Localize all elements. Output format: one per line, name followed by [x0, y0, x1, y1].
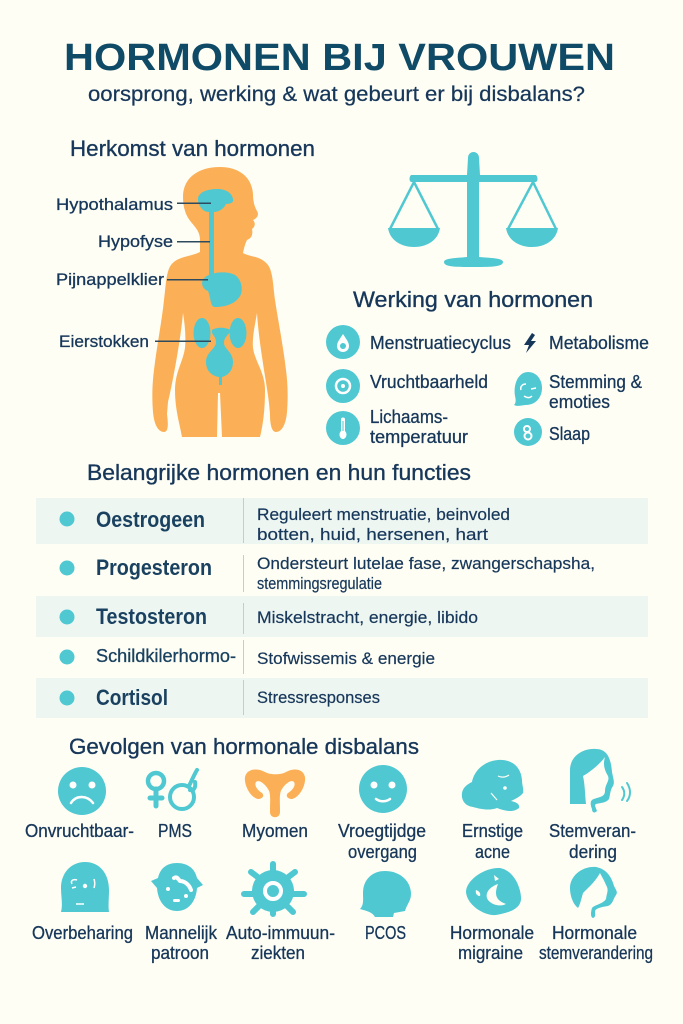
organ: liver shape	[202, 272, 242, 307]
item: Stemming en emoties: emoties	[549, 392, 610, 412]
heading: hormonen tabel: Belangrijke hormonen en hun functies	[87, 460, 471, 485]
row: Oestrogeen: Reguleert menstruatie, beinvoled	[257, 505, 510, 524]
item: Stemverandering	[549, 749, 636, 862]
row: Schildklierhormoon: Stofwissemis & energie	[257, 649, 435, 668]
row: Testosteron: Miskelstracht, energie, libido	[257, 608, 478, 627]
item: Hormonale migraine: Hormonale	[450, 923, 534, 943]
item: Slaap	[514, 418, 590, 446]
heading: werking: Werking van hormonen	[353, 287, 593, 312]
item: Lichaamstemperatuur: temperatuur	[370, 427, 468, 447]
item: Stemming en emoties: Stemming &	[549, 372, 642, 392]
item: Ernstige acne	[462, 760, 523, 862]
heading: gevolgen: Gevolgen van hormonale disbalans	[69, 734, 419, 759]
label: Hypofyse	[98, 232, 210, 251]
item: Metabolisme: Metabolisme	[549, 333, 649, 353]
icon: balance scale	[388, 152, 558, 267]
item: Vroegtijdige overgang: Vroegtijdge	[338, 821, 426, 841]
body silhouette	[152, 167, 288, 437]
row: Progesteron	[60, 554, 595, 593]
item: Ernstige acne: Ernstige	[462, 821, 523, 841]
item: PCOS	[360, 871, 411, 943]
item: Ernstige acne: acne	[475, 842, 510, 862]
item: Onvruchtbaarheid: Onvruchtbaar-	[25, 821, 134, 841]
row: Oestrogeen	[36, 498, 648, 544]
panel: herkomst van hormonen	[56, 136, 315, 437]
row: Progesteron: Progesteron	[96, 555, 212, 580]
item: Lichaamstemperatuur	[326, 407, 468, 447]
panel: werking van hormonen	[326, 287, 649, 447]
item: Slaap: Slaap	[549, 424, 590, 444]
organ: ovaries and uterus	[194, 318, 246, 385]
label: Hypofyse: Hypofyse	[98, 232, 173, 251]
title: HORMONEN BIJ VROUWEN	[64, 37, 615, 79]
item: Menstruatiecyclus: Menstruatiecyclus	[370, 333, 511, 353]
item: Myomen: Myomen	[242, 821, 308, 841]
row: Progesteron: Ondersteurt lutelae fase, zwangerschapsha,	[257, 554, 595, 573]
item: PMS	[148, 770, 197, 841]
row: Schildklierhormoon	[60, 640, 435, 674]
item: Hormonale migraine	[450, 868, 534, 963]
heading: herkomst: Herkomst van hormonen	[70, 136, 315, 161]
item: Hormonale stemverandering	[539, 867, 653, 963]
subtitle: oorsprong, werking & wat gebeurt er bij disbalans?	[88, 83, 585, 106]
row: Oestrogeen: botten, huid, hersenen, hart	[257, 525, 488, 544]
organ: hypothalamus and stalk	[198, 189, 233, 276]
row: Cortisol: Cortisol	[96, 685, 168, 710]
row: Cortisol	[36, 678, 648, 718]
item: Overbeharing: Overbeharing	[32, 923, 133, 943]
item: Vroegtijdige overgang: overgang	[348, 842, 417, 862]
item: Hormonale stemverandering: stemverandering	[539, 943, 653, 963]
row: Testosteron: Testosteron	[96, 604, 207, 629]
item: Vruchtbaarheid: Vruchtbaarheld	[370, 372, 488, 392]
row: Cortisol: Stressresponses	[257, 688, 380, 707]
item: Stemverandering: dering	[569, 842, 617, 862]
item: Vroegtijdige overgang	[338, 765, 426, 862]
item: Onvruchtbaarheid	[25, 767, 134, 841]
item: PCOS: PCOS	[365, 923, 406, 943]
item: Lichaamstemperatuur: Lichaams-	[370, 407, 448, 427]
item: Mannelijk patroon: patroon	[151, 943, 209, 963]
item: Mannelijk patroon	[145, 863, 218, 963]
item: Hormonale stemverandering: Hormonale	[552, 923, 637, 943]
item: Auto-immuunziekten: Auto-immuun-	[226, 923, 335, 943]
item: Auto-immuunziekten	[226, 864, 335, 963]
row: Testosteron	[36, 596, 648, 637]
label: Hypothalamus: Hypothalamus	[56, 195, 173, 214]
item: Vruchtbaarheid	[326, 369, 488, 403]
item: PMS: PMS	[158, 821, 192, 841]
panel: gevolgen van hormonale disbalans	[25, 734, 653, 963]
item: Stemverandering: Stemveran-	[549, 821, 636, 841]
row: Oestrogeen: Oestrogeen	[96, 507, 205, 532]
label: Pijnappelklier: Pijnappelklier	[56, 270, 164, 289]
row: Schildklierhormoon: Schildkilerhormo-	[96, 646, 236, 666]
item: Auto-immuunziekten: ziekten	[251, 943, 305, 963]
item: Overbeharing	[32, 862, 133, 943]
item: Stemming en emoties	[514, 372, 642, 412]
item: Mannelijk patroon: Mannelijk	[145, 923, 218, 943]
item: Hormonale migraine: migraine	[458, 943, 523, 963]
item: Menstruatiecyclus	[326, 325, 511, 359]
label: Eierstokken: Eierstokken	[59, 332, 149, 351]
panel: belangrijke hormonen en hun functies	[36, 460, 648, 718]
row: Progesteron: stemmingsregulatie	[257, 574, 382, 593]
item: Myomen	[242, 769, 308, 841]
